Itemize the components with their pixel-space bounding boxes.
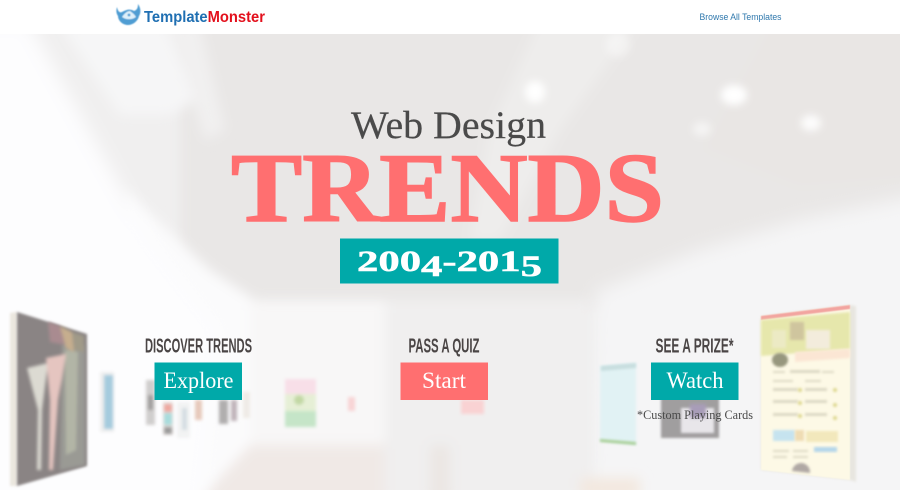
column: discover trends: Explore [164, 368, 234, 393]
column: see a prize: SEE A PRIZE* [656, 336, 734, 358]
left wall [0, 20, 220, 490]
date badge: 200 [357, 245, 402, 278]
date badge: -201 [442, 245, 521, 278]
artwork: website poster [761, 305, 856, 482]
date badge [340, 238, 558, 284]
column: pass a quiz: Start [422, 368, 467, 393]
column: see a prize: Watch [666, 368, 724, 393]
logo text: TemplateMonster [144, 9, 265, 26]
logo icon: monster head [116, 4, 140, 25]
column: pass a quiz [400, 336, 488, 400]
date badge: 4 [421, 250, 442, 283]
header bar [0, 0, 900, 34]
centre wall and floor [100, 190, 640, 490]
artwork: right wall pictures [600, 363, 719, 445]
column: discover trends [145, 336, 252, 400]
column: discover trends: DISCOVER TRENDS [145, 336, 252, 358]
column: see a prize: *Custom Playing Cards [637, 408, 753, 422]
right wall [592, 195, 900, 490]
column: pass a quiz: PASS A QUIZ [408, 336, 480, 358]
date badge: 5 [521, 250, 542, 283]
ceiling lights [525, 33, 821, 136]
artwork: small wall pictures [100, 372, 484, 438]
column: see a prize [637, 336, 753, 422]
ceiling [180, 20, 900, 310]
title: Web Design: Web Design [351, 104, 546, 147]
nav link: Browse All Templates [700, 12, 782, 22]
artwork: champagne painting [10, 312, 87, 486]
title: TRENDS: TRENDS [231, 134, 664, 243]
